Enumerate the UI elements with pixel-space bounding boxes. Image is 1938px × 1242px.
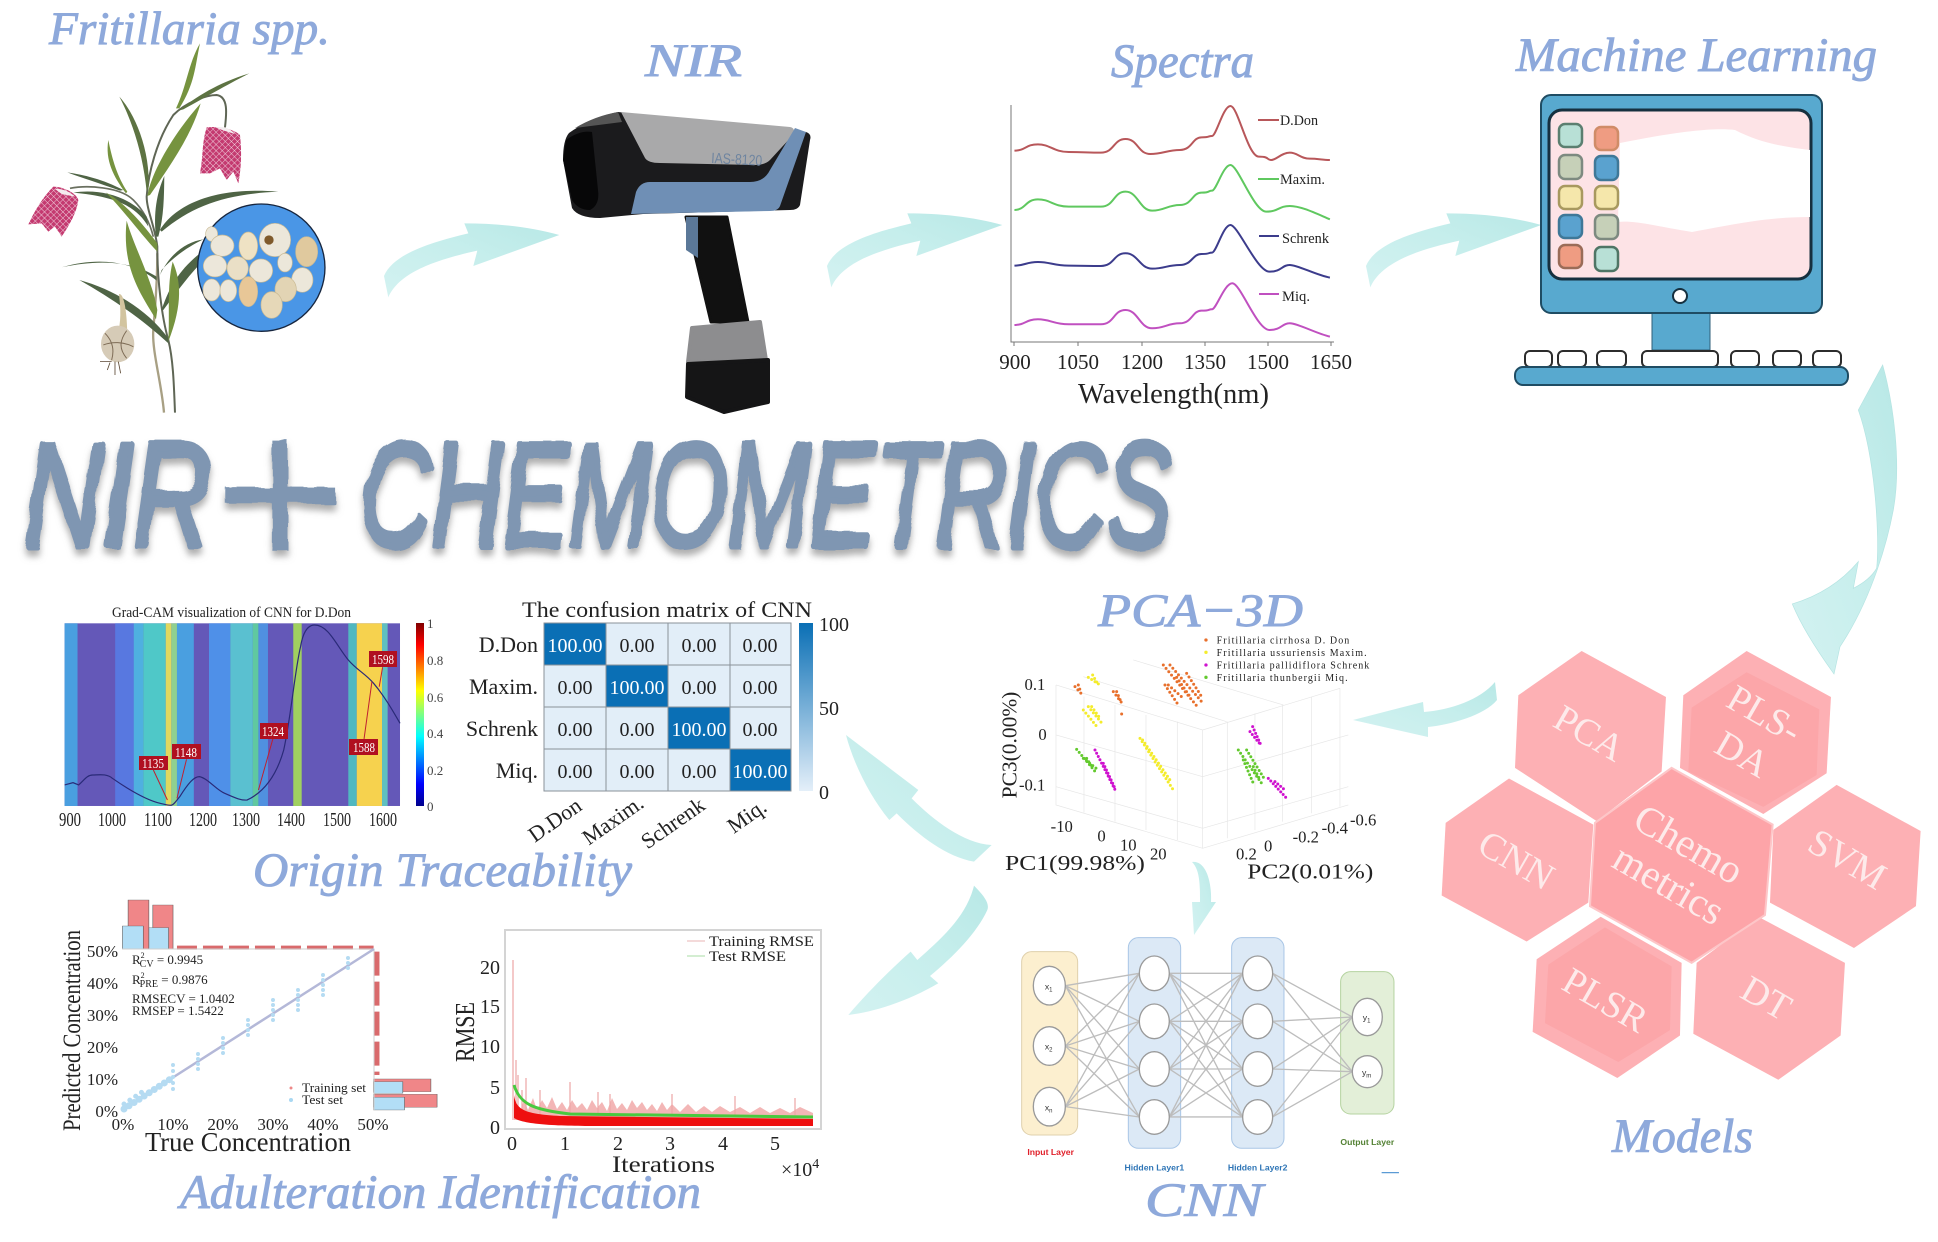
axis ticks: predicted: 30% <box>87 1006 118 1025</box>
stats: CV <box>140 959 154 970</box>
title: CNN: CNN <box>1145 1174 1267 1227</box>
arrow: PCA to CNN <box>1192 862 1216 935</box>
axis ticks: RMSE: 0 <box>490 1117 500 1139</box>
layer labels: Hidden Layer2 <box>1228 1163 1288 1173</box>
axis ticks: RMSE: 5 <box>490 1077 500 1099</box>
hexagon labels: CNN <box>1471 822 1561 899</box>
axis title: true concentration: True Concentration <box>145 1127 351 1157</box>
legend: RMSE: Test RMSE <box>709 949 786 965</box>
chart: confusion matrix: 0.00 <box>558 719 592 741</box>
chart: confusion matrix: 0.00 <box>682 635 716 657</box>
colorbar: confusion matrix <box>799 614 849 804</box>
callouts: wavelength peaks: 1598 <box>372 653 394 668</box>
axis: Grad-CAM wavelength: 1300 <box>232 809 260 831</box>
chart title: confusion matrix: The confusion matrix of CNN <box>522 597 812 622</box>
axis ticks: PC1: 10 <box>1120 836 1137 855</box>
axis ticks: iterations: 3 <box>665 1133 675 1155</box>
hexagon: PLS-DA <box>1680 651 1831 814</box>
axis title: RMSE: RMSE <box>450 1002 480 1062</box>
legend: spectra series: D.Don <box>1280 113 1318 129</box>
axis ticks: PC2: 0.2 <box>1236 845 1257 864</box>
stats: = 0.9945 <box>154 952 203 967</box>
hexagon labels: DT <box>1734 968 1798 1029</box>
main title: NIR + CHEMOMETRICS: CHEMOMETRICS <box>360 413 1172 578</box>
hexagon: SVM <box>1770 785 1921 948</box>
axis ticks: iterations: 4 <box>718 1133 728 1155</box>
node symbols: n <box>1049 1108 1052 1114</box>
axis ticks: PC2: -0.6 <box>1350 811 1376 830</box>
diagram: chemometric model hexagons <box>1442 651 1921 1080</box>
colorbar: Grad-CAM: 0.4 <box>427 726 444 741</box>
axis ticks: PC2: 0 <box>1264 836 1272 855</box>
marginal histograms <box>122 900 437 1110</box>
axis ticks: RMSE <box>480 957 500 1139</box>
axis: Grad-CAM wavelength: 1100 <box>144 809 172 831</box>
scatter: test and training points <box>124 958 348 1109</box>
column labels <box>523 790 771 854</box>
hexagon: PCA <box>1515 651 1666 821</box>
axis ticks: true: 20% <box>207 1115 239 1134</box>
node symbols: x <box>1045 1042 1049 1052</box>
node symbols: x <box>1045 1102 1049 1112</box>
axis ticks: true: 50% <box>357 1115 389 1134</box>
axis ticks: predicted <box>87 942 118 1121</box>
arrow: NIR to spectra <box>827 213 1002 287</box>
legend: RMSE <box>687 934 814 965</box>
bulb with roots <box>100 294 134 375</box>
layer labels: Input Layer <box>1027 1147 1075 1157</box>
row labels: Miq. <box>496 758 538 783</box>
stats: RMSEP = 1.5422 <box>132 1003 224 1018</box>
node symbols: 2 <box>1049 1048 1053 1054</box>
axis: wavelength ticks: 1050 <box>1057 350 1099 374</box>
axis title: predicted concentration: Predicted Concentration <box>59 930 86 1131</box>
column labels: Miq. <box>722 794 771 838</box>
node symbols: m <box>1366 1073 1371 1079</box>
node symbols: y <box>1362 1067 1366 1077</box>
axis: Grad-CAM wavelength: 1500 <box>323 809 351 831</box>
axis ticks: PC3 <box>1019 675 1047 795</box>
chart title: Grad-CAM: Grad-CAM visualization of CNN for D.Don <box>112 605 351 621</box>
legend: species: Fritillaria pallidiflora Schrenk <box>1217 661 1369 672</box>
axis: Grad-CAM wavelength <box>59 809 397 831</box>
callouts: wavelength peaks <box>139 651 397 772</box>
illustration: Fritillaria plant <box>28 43 278 413</box>
chart: confusion matrix: 100.00 <box>610 677 664 699</box>
axis ticks: predicted: 0% <box>95 1102 118 1121</box>
stats: PRE <box>140 979 158 990</box>
chart: PCA 3D scatter <box>998 636 1376 883</box>
layer boxes <box>1022 938 1394 1148</box>
axis: Grad-CAM wavelength: 900 <box>59 809 81 831</box>
chart: confusion matrix: 0.00 <box>558 677 592 699</box>
axis ticks: RMSE: 15 <box>480 996 500 1018</box>
node symbols: 1 <box>1049 987 1053 993</box>
legend: spectra series: Schrenk <box>1282 231 1329 247</box>
axis ticks: iterations: 5 <box>770 1133 780 1155</box>
legend: spectra series: Maxim. <box>1280 172 1325 188</box>
legend: species <box>1204 636 1369 684</box>
chart: confusion matrix: 0.00 <box>742 677 778 699</box>
hexagon: PLSR <box>1533 917 1682 1078</box>
colorbar: Grad-CAM: 0.2 <box>427 763 443 778</box>
axis ticks: true: 0% <box>112 1115 134 1134</box>
stats <box>132 951 235 1018</box>
axis ticks: RMSE: 20 <box>480 957 500 979</box>
arrow: PCA to adulteration identification <box>848 886 988 1015</box>
legend: spectra series: Miq. <box>1282 289 1310 305</box>
axis ticks: predicted: 50% <box>87 942 118 961</box>
diagram: neural network <box>1022 938 1399 1173</box>
app icons <box>1559 124 1618 271</box>
main title: NIR + CHEMOMETRICS <box>24 366 1172 618</box>
chart: confusion matrix: 0.00 <box>558 761 592 783</box>
axis: wavelength ticks: 900 <box>999 350 1031 374</box>
hexagon labels: PLS- <box>1720 677 1808 752</box>
node symbols: 1 <box>1367 1019 1371 1025</box>
hexagon: Chemometrics centre <box>1590 768 1773 963</box>
hexagon: DT <box>1693 917 1845 1080</box>
illustration: bulbs on blue circle <box>198 204 325 331</box>
axis ticks: predicted: 10% <box>87 1070 118 1089</box>
node symbols <box>1045 981 1371 1114</box>
colorbar: Grad-CAM: 0.8 <box>427 653 443 668</box>
hexagon labels: Chemo <box>1626 794 1752 893</box>
axis exponent: 4 <box>812 1157 819 1172</box>
axis ticks: iterations <box>507 1133 780 1155</box>
stats: 2 <box>141 951 145 960</box>
chart: confusion matrix: 0.00 <box>682 761 716 783</box>
axis ticks: RMSE: 10 <box>480 1036 500 1058</box>
axis exponent: ×10 <box>781 1159 812 1181</box>
hexagon labels: DA <box>1708 723 1777 787</box>
axis: wavelength ticks: 1500 <box>1247 350 1289 374</box>
legend: species: Fritillaria ussuriensis Maxim. <box>1217 648 1367 659</box>
row labels <box>466 632 538 783</box>
axis ticks: PC3: -0.1 <box>1019 776 1045 795</box>
hexagon labels: PCA <box>1546 697 1632 771</box>
colorbar: Grad-CAM <box>416 616 444 814</box>
icon: computer monitor and keyboard <box>1515 95 1848 385</box>
stats: = 0.9876 <box>158 972 208 987</box>
axis ticks: predicted: 40% <box>87 974 118 993</box>
trace: training band <box>514 1095 813 1126</box>
chart: NIR spectra <box>999 105 1352 410</box>
chart: confusion matrix: 0.00 <box>682 677 716 699</box>
nodes <box>1033 956 1382 1134</box>
title: Spectra: Spectra <box>1111 35 1254 88</box>
node symbols: y <box>1363 1013 1367 1023</box>
axis ticks: PC1: -10 <box>1051 817 1073 836</box>
legend: scatter: Test set <box>302 1092 343 1107</box>
keyboard keys <box>1525 351 1841 367</box>
stats: R <box>132 952 141 967</box>
axis title: PC1: PC1(99.98%) <box>1005 853 1145 875</box>
axis: wavelength ticks: 1350 <box>1184 350 1226 374</box>
axis title: iterations: Iterations <box>612 1152 715 1177</box>
flower: lower blossom <box>28 187 78 237</box>
chart: confusion matrix: 100.00 <box>732 761 788 783</box>
axis: wavelength ticks <box>999 350 1352 374</box>
callouts: wavelength peaks: 1588 <box>353 741 375 756</box>
node symbols: x <box>1045 981 1049 991</box>
trace: training spikes <box>513 960 813 1120</box>
title: Machine Learning: Machine Learning <box>1515 29 1877 82</box>
callouts: wavelength peaks: 1324 <box>262 725 284 740</box>
axis ticks: PC1: 20 <box>1150 845 1167 864</box>
arrow: models to PCA <box>1353 682 1497 737</box>
axis title: PC2: PC2(0.01%) <box>1247 861 1373 883</box>
stats: RMSECV = 1.0402 <box>132 991 235 1006</box>
chart: confusion matrix: 0.00 <box>742 635 778 657</box>
chart: confusion matrix: 0.00 <box>620 761 654 783</box>
hexagon: CNN <box>1442 779 1593 942</box>
axis ticks: PC2 <box>1236 811 1376 864</box>
chart: confusion matrix: 0.00 <box>620 635 654 657</box>
colorbar: confusion matrix: 100 <box>819 614 849 636</box>
legend: spectra series <box>1258 113 1329 305</box>
chart: Grad-CAM heatmap <box>59 605 444 831</box>
axis ticks: iterations: 0 <box>507 1133 517 1155</box>
axis ticks: PC3: 0 <box>1038 725 1047 744</box>
row labels: Schrenk <box>466 716 538 741</box>
chart: confusion matrix: 0.00 <box>742 719 778 741</box>
legend: scatter <box>289 1080 366 1107</box>
chart: confusion matrix: 100.00 <box>548 635 602 657</box>
axis: wavelength ticks: 1650 <box>1310 350 1352 374</box>
title: Origin Traceability: Origin Traceability <box>253 844 633 897</box>
colorbar: Grad-CAM: 0 <box>427 799 434 814</box>
row labels: Maxim. <box>469 674 538 699</box>
legend: species: Fritillaria thunbergii Miq. <box>1217 673 1348 684</box>
flower: upper blossom <box>200 127 241 183</box>
chart: predicted vs true concentration <box>59 900 437 1157</box>
axis ticks: true: 30% <box>257 1115 289 1134</box>
main title: NIR + CHEMOMETRICS: + <box>214 366 346 618</box>
trace: test band <box>514 1085 813 1117</box>
title: Adulteration Identification: Adulteration Identification <box>177 1166 701 1219</box>
title: PCA-3D: PCA−3D <box>1097 585 1303 637</box>
row labels: D.Don <box>479 632 538 657</box>
arrow: PCA to origin traceability <box>846 735 992 862</box>
chart: confusion matrix: 100.00 <box>672 719 726 741</box>
arrow: plant to NIR <box>384 223 559 297</box>
arrow: spectra to machine learning <box>1366 213 1541 287</box>
connections <box>1065 973 1352 1117</box>
callouts: wavelength peaks: 1135 <box>142 757 164 772</box>
column labels: D.Don <box>523 793 586 847</box>
chart: confusion matrix: 0.00 <box>620 719 654 741</box>
axis: Grad-CAM wavelength: 1600 <box>369 809 397 831</box>
axis ticks: iterations: 1 <box>560 1133 570 1155</box>
stats: 2 <box>141 971 145 980</box>
title: Fritillaria spp.: Fritillaria spp. <box>48 3 330 55</box>
title: Models: Models <box>1611 1110 1753 1163</box>
chart: RMSE training curve <box>450 930 821 1181</box>
colorbar: Grad-CAM: 1 <box>427 616 434 631</box>
chart: confusion matrix <box>466 597 849 854</box>
column labels: Schrenk <box>636 792 709 854</box>
stats: R <box>132 972 141 987</box>
axis title: wavelength: Wavelength(nm) <box>1078 379 1269 410</box>
axis: Grad-CAM wavelength: 1000 <box>98 809 126 831</box>
hexagon labels: metrics <box>1605 834 1733 934</box>
axis ticks: PC3: 0.1 <box>1024 675 1045 694</box>
title: NIR: NIR <box>644 35 742 87</box>
axis ticks: true <box>112 1115 389 1134</box>
colorbar: Grad-CAM: 0.6 <box>427 690 444 705</box>
colorbar: confusion matrix: 0 <box>819 782 829 804</box>
axis ticks: PC1: 0 <box>1097 826 1106 845</box>
axis ticks: iterations: 2 <box>613 1133 623 1155</box>
legend: species: Fritillaria cirrhosa D. Don <box>1217 636 1349 647</box>
axis ticks: true: 10% <box>157 1115 189 1134</box>
illustration: NIR spectrometer <box>563 112 810 412</box>
arrow: machine learning to models <box>1792 365 1897 674</box>
callouts: wavelength peaks: 1148 <box>175 746 197 761</box>
layer labels <box>1027 1137 1395 1173</box>
axis: Grad-CAM wavelength: 1200 <box>189 809 217 831</box>
axis ticks: predicted: 20% <box>87 1038 118 1057</box>
axis ticks: true: 40% <box>307 1115 339 1134</box>
axis ticks: PC2: -0.2 <box>1293 827 1319 846</box>
device model label: IAS-8120 <box>711 150 763 170</box>
axis title: PC3: PC3(0.00%) <box>998 692 1022 798</box>
column labels: Maxim. <box>577 790 648 850</box>
main title: NIR + CHEMOMETRICS: NIR <box>24 413 212 578</box>
layer labels: Output Layer <box>1340 1137 1395 1147</box>
axis ticks: PC1 <box>1051 817 1167 864</box>
layer labels: Hidden Layer1 <box>1124 1163 1184 1173</box>
colorbar: confusion matrix: 50 <box>819 698 839 720</box>
hexagon labels: SVM <box>1801 821 1893 898</box>
axis ticks: PC2: -0.4 <box>1322 818 1349 837</box>
hexagon labels <box>1471 677 1893 1042</box>
clusters <box>1075 665 1287 798</box>
axis: wavelength ticks: 1200 <box>1121 350 1163 374</box>
legend: RMSE: Training RMSE <box>709 934 814 950</box>
legend: scatter: Training set <box>302 1080 366 1095</box>
axis: Grad-CAM wavelength: 1400 <box>277 809 305 831</box>
hexagon labels: PLSR <box>1555 960 1655 1042</box>
